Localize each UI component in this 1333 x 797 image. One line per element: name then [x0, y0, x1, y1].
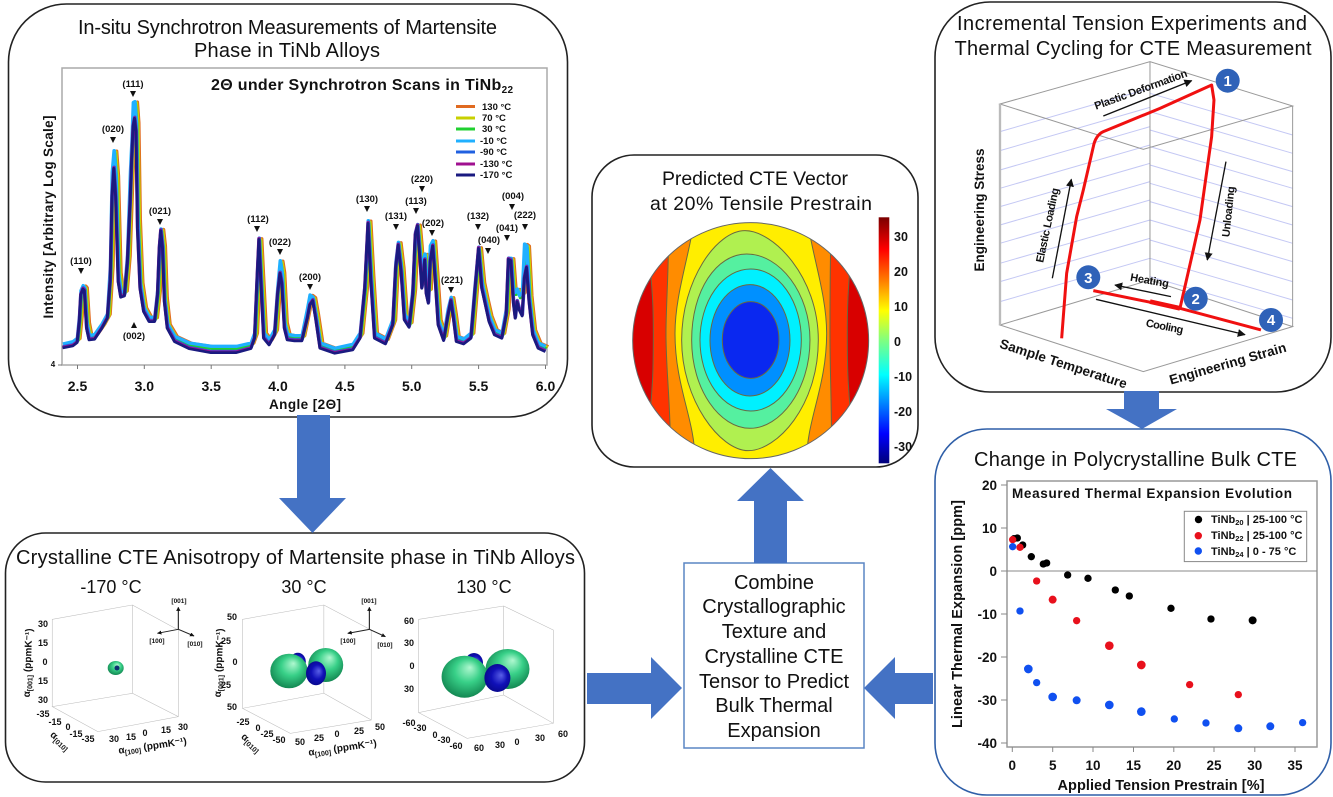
chart: synchrotron diffraction spectrum: 4 [51, 360, 56, 369]
axis tick labels: 30 [1247, 758, 1262, 773]
axis tick labels: 30 [535, 733, 545, 743]
arrow: tension experiments to bulk CTE [1106, 391, 1177, 429]
axis tick labels: 0 [232, 657, 238, 667]
axis titles: (ppmK⁻¹) [140, 736, 188, 754]
axis tick labels [36, 612, 568, 753]
chart: thermal expansion scatter [950, 478, 1317, 794]
annotations on 3D chart: Heating [1129, 272, 1170, 290]
legend: temperatures [456, 102, 512, 181]
axis tick labels: 10 [1085, 758, 1101, 773]
legend: temperatures: 70 °C [482, 113, 506, 124]
axis tick labels: 30 [404, 684, 414, 694]
crystal axes triads [157, 607, 385, 637]
plot: 130 C ellipsoid [442, 649, 530, 698]
heading: anisotropy title: Crystalline CTE Anisotropy of Martensite phase in TiNb Alloys [16, 547, 575, 569]
axis tick labels: 15 [38, 638, 48, 648]
axis tick labels: 15 [38, 676, 48, 686]
legend: temperatures: 130 °C [482, 102, 511, 113]
axis titles on 3D chart: Engineering Strain [1168, 340, 1288, 388]
axis tick labels: -50 [272, 735, 286, 745]
axis tick labels [977, 478, 1303, 773]
annotations on 3D chart: Plastic Deformation [1093, 68, 1189, 113]
triad labels: [010] [377, 642, 393, 649]
triad labels: [010] [187, 641, 203, 648]
peak labels: (113) [405, 196, 427, 207]
triad labels: [100] [340, 638, 356, 645]
heading: synchrotron panel title [78, 17, 497, 62]
peak labels: (111) [122, 79, 144, 90]
colorbar: 20 [894, 265, 908, 279]
step markers 1-4: 1 [1224, 73, 1232, 90]
text box: combine texture and tensor: Expansion [727, 720, 821, 742]
axis tick labels: 0 [1009, 758, 1016, 773]
axis tick labels: 35 [1287, 758, 1303, 773]
axis tick labels: -25 [260, 729, 274, 739]
x axis ticks: 4.0 [268, 378, 288, 394]
peak labels: (110) [70, 256, 92, 267]
peak labels: (040) [478, 235, 500, 246]
peak labels: (200) [299, 272, 321, 283]
axis tick labels: 0 [514, 737, 520, 747]
panel: incremental tension experiments [935, 2, 1331, 392]
temperature subtitles: 130 °C [456, 577, 512, 597]
legend: alloys: | 25-100 °C [1244, 514, 1302, 526]
peak labels: (220) [411, 174, 433, 185]
axis tick labels: 15 [161, 725, 171, 735]
peak labels: (132) [467, 211, 489, 222]
axis tick labels: 60 [474, 743, 484, 753]
axis titles: (ppmK⁻¹) [330, 738, 378, 756]
axis tick labels: -35 [36, 709, 50, 719]
peak labels: (221) [441, 275, 463, 286]
legend: alloys: TiNb [1211, 546, 1235, 558]
legend: alloys: TiNb [1211, 514, 1235, 526]
axis tick labels: 25 [1206, 758, 1222, 773]
peak labels: (022) [269, 237, 291, 248]
text box: combine texture and tensor: Crystallographic [702, 596, 846, 618]
annotations on 3D chart: Cooling [1145, 318, 1184, 337]
x axis ticks: 5.0 [402, 378, 422, 394]
colorbar [879, 217, 912, 463]
heading: synchrotron panel title: Phase in TiNb Alloys [194, 40, 380, 62]
axis tick labels: 0 [989, 564, 997, 579]
chart: thermal expansion scatter: Measured Thermal Expansion Evolution [1012, 486, 1292, 501]
axis tick labels: -15 [69, 729, 83, 739]
x axis ticks: 3.5 [201, 378, 221, 394]
peak labels: (112) [247, 214, 269, 225]
legend: alloys: | 0 - 75 °C [1244, 546, 1296, 558]
legend: temperatures: -90 °C [480, 147, 507, 158]
arrow: synchrotron to anisotropy [279, 415, 346, 533]
chart: thermal expansion scatter: Linear Thermal Expansion [ppm] [950, 500, 966, 728]
x axis ticks: 2.5 [68, 378, 87, 394]
axis tick labels: 60 [404, 616, 414, 626]
x axis ticks: 5.5 [469, 378, 489, 394]
annotations on 3D chart: Unloading [1220, 186, 1238, 238]
chart: pole figure contour [630, 200, 870, 460]
step markers 1-4 [1076, 69, 1283, 332]
axis tick labels: -30 [977, 693, 997, 708]
panel: predicted CTE vector [592, 155, 918, 467]
axis tick labels: 0 [432, 730, 438, 740]
axis tick labels: -60 [402, 718, 416, 728]
legend: alloys: 20 [1235, 518, 1244, 527]
axis tick labels: 5 [1049, 758, 1057, 773]
axis titles: α [22, 691, 33, 698]
arrow: bulk CTE to box [864, 657, 933, 719]
text box: combine texture and tensor [684, 563, 864, 748]
axis tick labels: 50 [227, 702, 237, 712]
text box: combine texture and tensor: Crystalline CTE [705, 646, 843, 668]
heading: tension title: Thermal Cycling for CTE Measurement [954, 38, 1312, 60]
panel: crystalline CTE anisotropy [6, 533, 584, 782]
legend: alloys [1184, 511, 1307, 562]
annotations on 3D chart [1034, 68, 1238, 337]
legend: alloys: | 25-100 °C [1244, 530, 1302, 542]
axis tick labels: -30 [413, 723, 427, 733]
peak labels: (020) [102, 124, 124, 135]
heading: predicted CTE title: Predicted CTE Vector [662, 168, 848, 190]
axis tick labels: -20 [977, 650, 997, 665]
text box: combine texture and tensor: Texture and [722, 621, 826, 643]
axis tick labels: 25 [221, 636, 231, 646]
axis tick labels: -10 [977, 607, 997, 622]
axis titles: [100] [125, 748, 142, 757]
axis titles: α [118, 745, 125, 757]
axis titles: [010] [243, 739, 259, 756]
x axis ticks [68, 378, 555, 394]
axis tick labels: 0 [142, 728, 148, 738]
triad labels [149, 598, 393, 649]
heading: predicted CTE title: at 20% Tensile Prestrain [650, 193, 872, 215]
peak labels: (130) [356, 194, 378, 205]
peak labels: (004) [502, 191, 524, 202]
arrow: anisotropy to box [587, 657, 682, 719]
axis tick labels: 0 [65, 722, 71, 732]
peak labels: (131) [385, 211, 407, 222]
axis titles on 3D chart: Engineering Stress [972, 148, 987, 272]
peak labels: (202) [422, 218, 444, 229]
axis titles on 3D chart [972, 148, 1288, 392]
colorbar: 30 [894, 230, 908, 244]
temperature subtitles: -170 °C [80, 577, 142, 597]
legend: temperatures: -130 °C [480, 159, 512, 170]
panel: in-situ synchrotron measurements [8, 4, 568, 417]
peak labels: (041) [496, 223, 518, 234]
chart: thermal expansion scatter: Applied Tension Prestrain [%] [1058, 778, 1265, 794]
axis tick labels: 0 [334, 729, 340, 739]
axis tick labels: 30 [495, 740, 505, 750]
axis tick labels: -40 [977, 736, 997, 751]
legend: temperatures: -10 °C [480, 136, 507, 147]
plot: -170 C ellipsoid [108, 661, 124, 675]
axis tick labels: 50 [227, 612, 237, 622]
axis tick labels: 10 [982, 521, 997, 536]
text box: combine texture and tensor: Bulk Thermal [715, 695, 833, 717]
chart: synchrotron diffraction spectrum: Intensity [Arbitrary Log Scale] [41, 116, 56, 318]
plot: 30 C ellipsoid [270, 648, 343, 688]
chart: 3D stress-strain-temperature [1000, 62, 1293, 372]
step markers 1-4: 2 [1192, 291, 1200, 308]
axis tick labels: 0 [42, 657, 48, 667]
axis tick labels: 30 [38, 695, 48, 705]
axis tick labels: 50 [375, 722, 385, 732]
step markers 1-4: 4 [1267, 312, 1276, 329]
axis tick labels: 20 [982, 478, 997, 493]
triad labels: [100] [149, 638, 165, 645]
peak labels [70, 79, 536, 342]
triad labels: [001] [361, 598, 377, 605]
colorbar: -20 [894, 405, 912, 419]
axis titles: (ppmK⁻¹) [214, 628, 226, 675]
axis tick labels: 25 [314, 733, 324, 743]
heading: tension title [954, 13, 1312, 60]
axis tick labels: 25 [221, 680, 231, 690]
axis tick labels: -30 [437, 735, 451, 745]
axis titles [22, 628, 378, 760]
axis titles: α [239, 732, 251, 744]
legend: alloys: TiNb [1211, 530, 1235, 542]
arrow: box to predicted CTE [737, 468, 804, 563]
colorbar: -30 [894, 440, 912, 454]
axis tick labels: 60 [558, 729, 568, 739]
peak labels: (002) [123, 331, 145, 342]
temperature subtitles: 30 °C [281, 577, 327, 597]
legend: temperatures: 30 °C [482, 124, 506, 135]
axis tick labels: -35 [81, 734, 95, 744]
text box: combine texture and tensor: Tensor to Predict [699, 671, 849, 693]
x axis ticks: 6.0 [536, 378, 555, 394]
chart: synchrotron diffraction spectrum [41, 68, 555, 412]
chart: synchrotron diffraction spectrum: Angle [2Θ] [269, 397, 341, 412]
axis titles: [001] [218, 675, 226, 691]
axis titles: [100] [315, 750, 332, 759]
heading: synchrotron panel title: In-situ Synchrotron Measurements of Martensite [78, 17, 497, 39]
axis titles: α [213, 691, 224, 698]
peak labels: (021) [149, 206, 171, 217]
axis titles: α [308, 747, 315, 759]
text box: combine texture and tensor: Combine [734, 572, 814, 594]
axis tick labels: 50 [295, 737, 305, 747]
axis tick labels: 25 [354, 726, 364, 736]
peak labels: (222) [514, 210, 536, 221]
axis tick labels: 30 [404, 638, 414, 648]
axis tick labels: -25 [236, 717, 250, 727]
axis tick labels: 15 [126, 732, 136, 742]
axis titles: α [48, 730, 60, 742]
plot frames [52, 605, 553, 738]
x axis ticks: 3.0 [135, 378, 154, 394]
temperature subtitles [80, 577, 512, 597]
colorbar: 10 [894, 300, 908, 314]
colorbar: 0 [894, 335, 901, 349]
axis tick labels: 20 [1166, 758, 1181, 773]
chart: synchrotron diffraction spectrum: 22 [502, 85, 513, 96]
axis tick labels: 0 [255, 723, 261, 733]
annotations on 3D chart: Elastic Loading [1034, 187, 1062, 264]
panel: change in polycrystalline bulk CTE [935, 429, 1331, 795]
triad labels: [001] [171, 598, 187, 605]
heading: bulk CTE title: Change in Polycrystalline Bulk CTE [974, 449, 1297, 471]
axis titles on 3D chart: Sample Temperature [998, 336, 1129, 392]
axis tick labels: 30 [109, 734, 119, 744]
axis titles: (ppmK⁻¹) [23, 628, 35, 675]
heading: predicted CTE title [650, 168, 872, 215]
x axis ticks: 4.5 [335, 378, 355, 394]
axis tick labels: 30 [178, 722, 188, 732]
axis tick labels: 30 [38, 619, 48, 629]
colorbar: -10 [894, 370, 912, 384]
legend: alloys: 22 [1235, 534, 1244, 543]
axis titles: [010] [52, 737, 68, 754]
legend: alloys: 24 [1235, 550, 1244, 559]
axis tick labels: 15 [1126, 758, 1141, 773]
legend: temperatures: -170 °C [480, 170, 512, 181]
axis tick labels: -60 [449, 741, 463, 751]
chart: synchrotron diffraction spectrum: 2Θ under Synchrotron Scans in TiNb [211, 77, 501, 94]
axis titles: [001] [27, 675, 35, 691]
heading: tension title: Incremental Tension Experiments and [957, 13, 1307, 35]
step markers 1-4: 3 [1084, 270, 1092, 287]
axis tick labels: -15 [48, 717, 62, 727]
axis tick labels: 0 [409, 661, 415, 671]
